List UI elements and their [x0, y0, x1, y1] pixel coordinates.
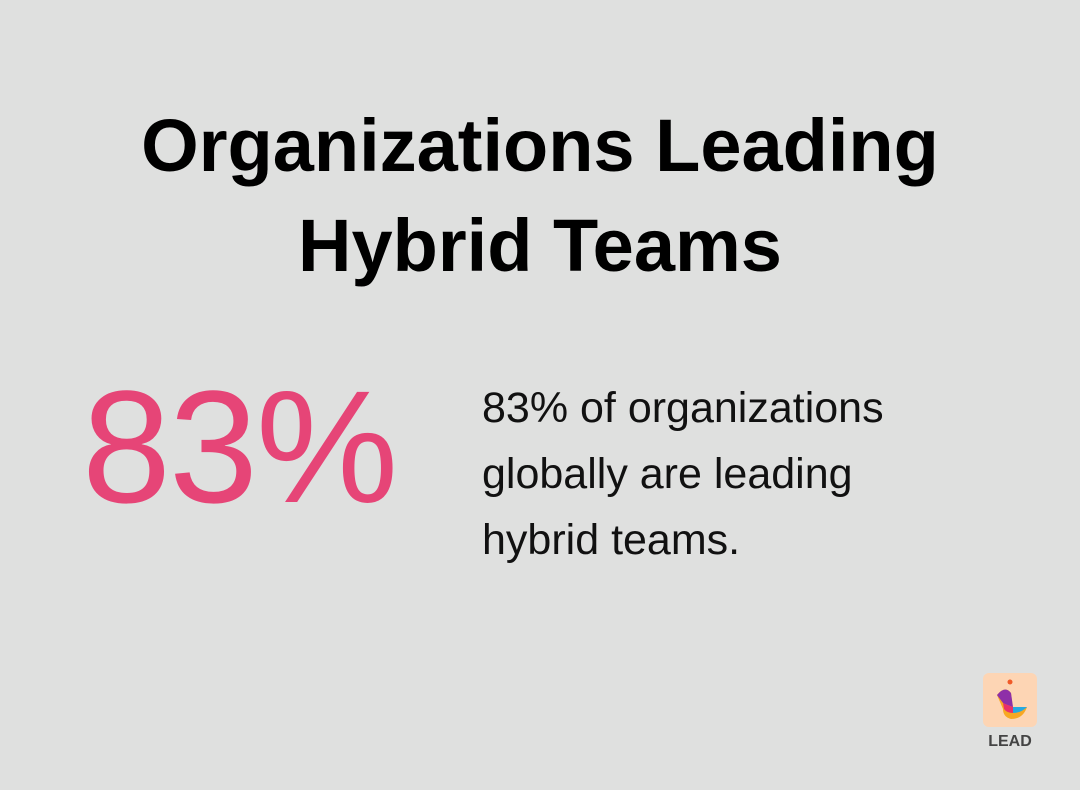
title: Organizations Leading [141, 104, 939, 187]
description text: 83% of organizations globally are leading hybrid teams. [482, 384, 884, 564]
title [141, 104, 939, 287]
logo [983, 673, 1037, 750]
big stat number: 83% [82, 357, 396, 536]
title: Hybrid Teams [298, 204, 782, 287]
logo: LEAD [988, 733, 1032, 750]
